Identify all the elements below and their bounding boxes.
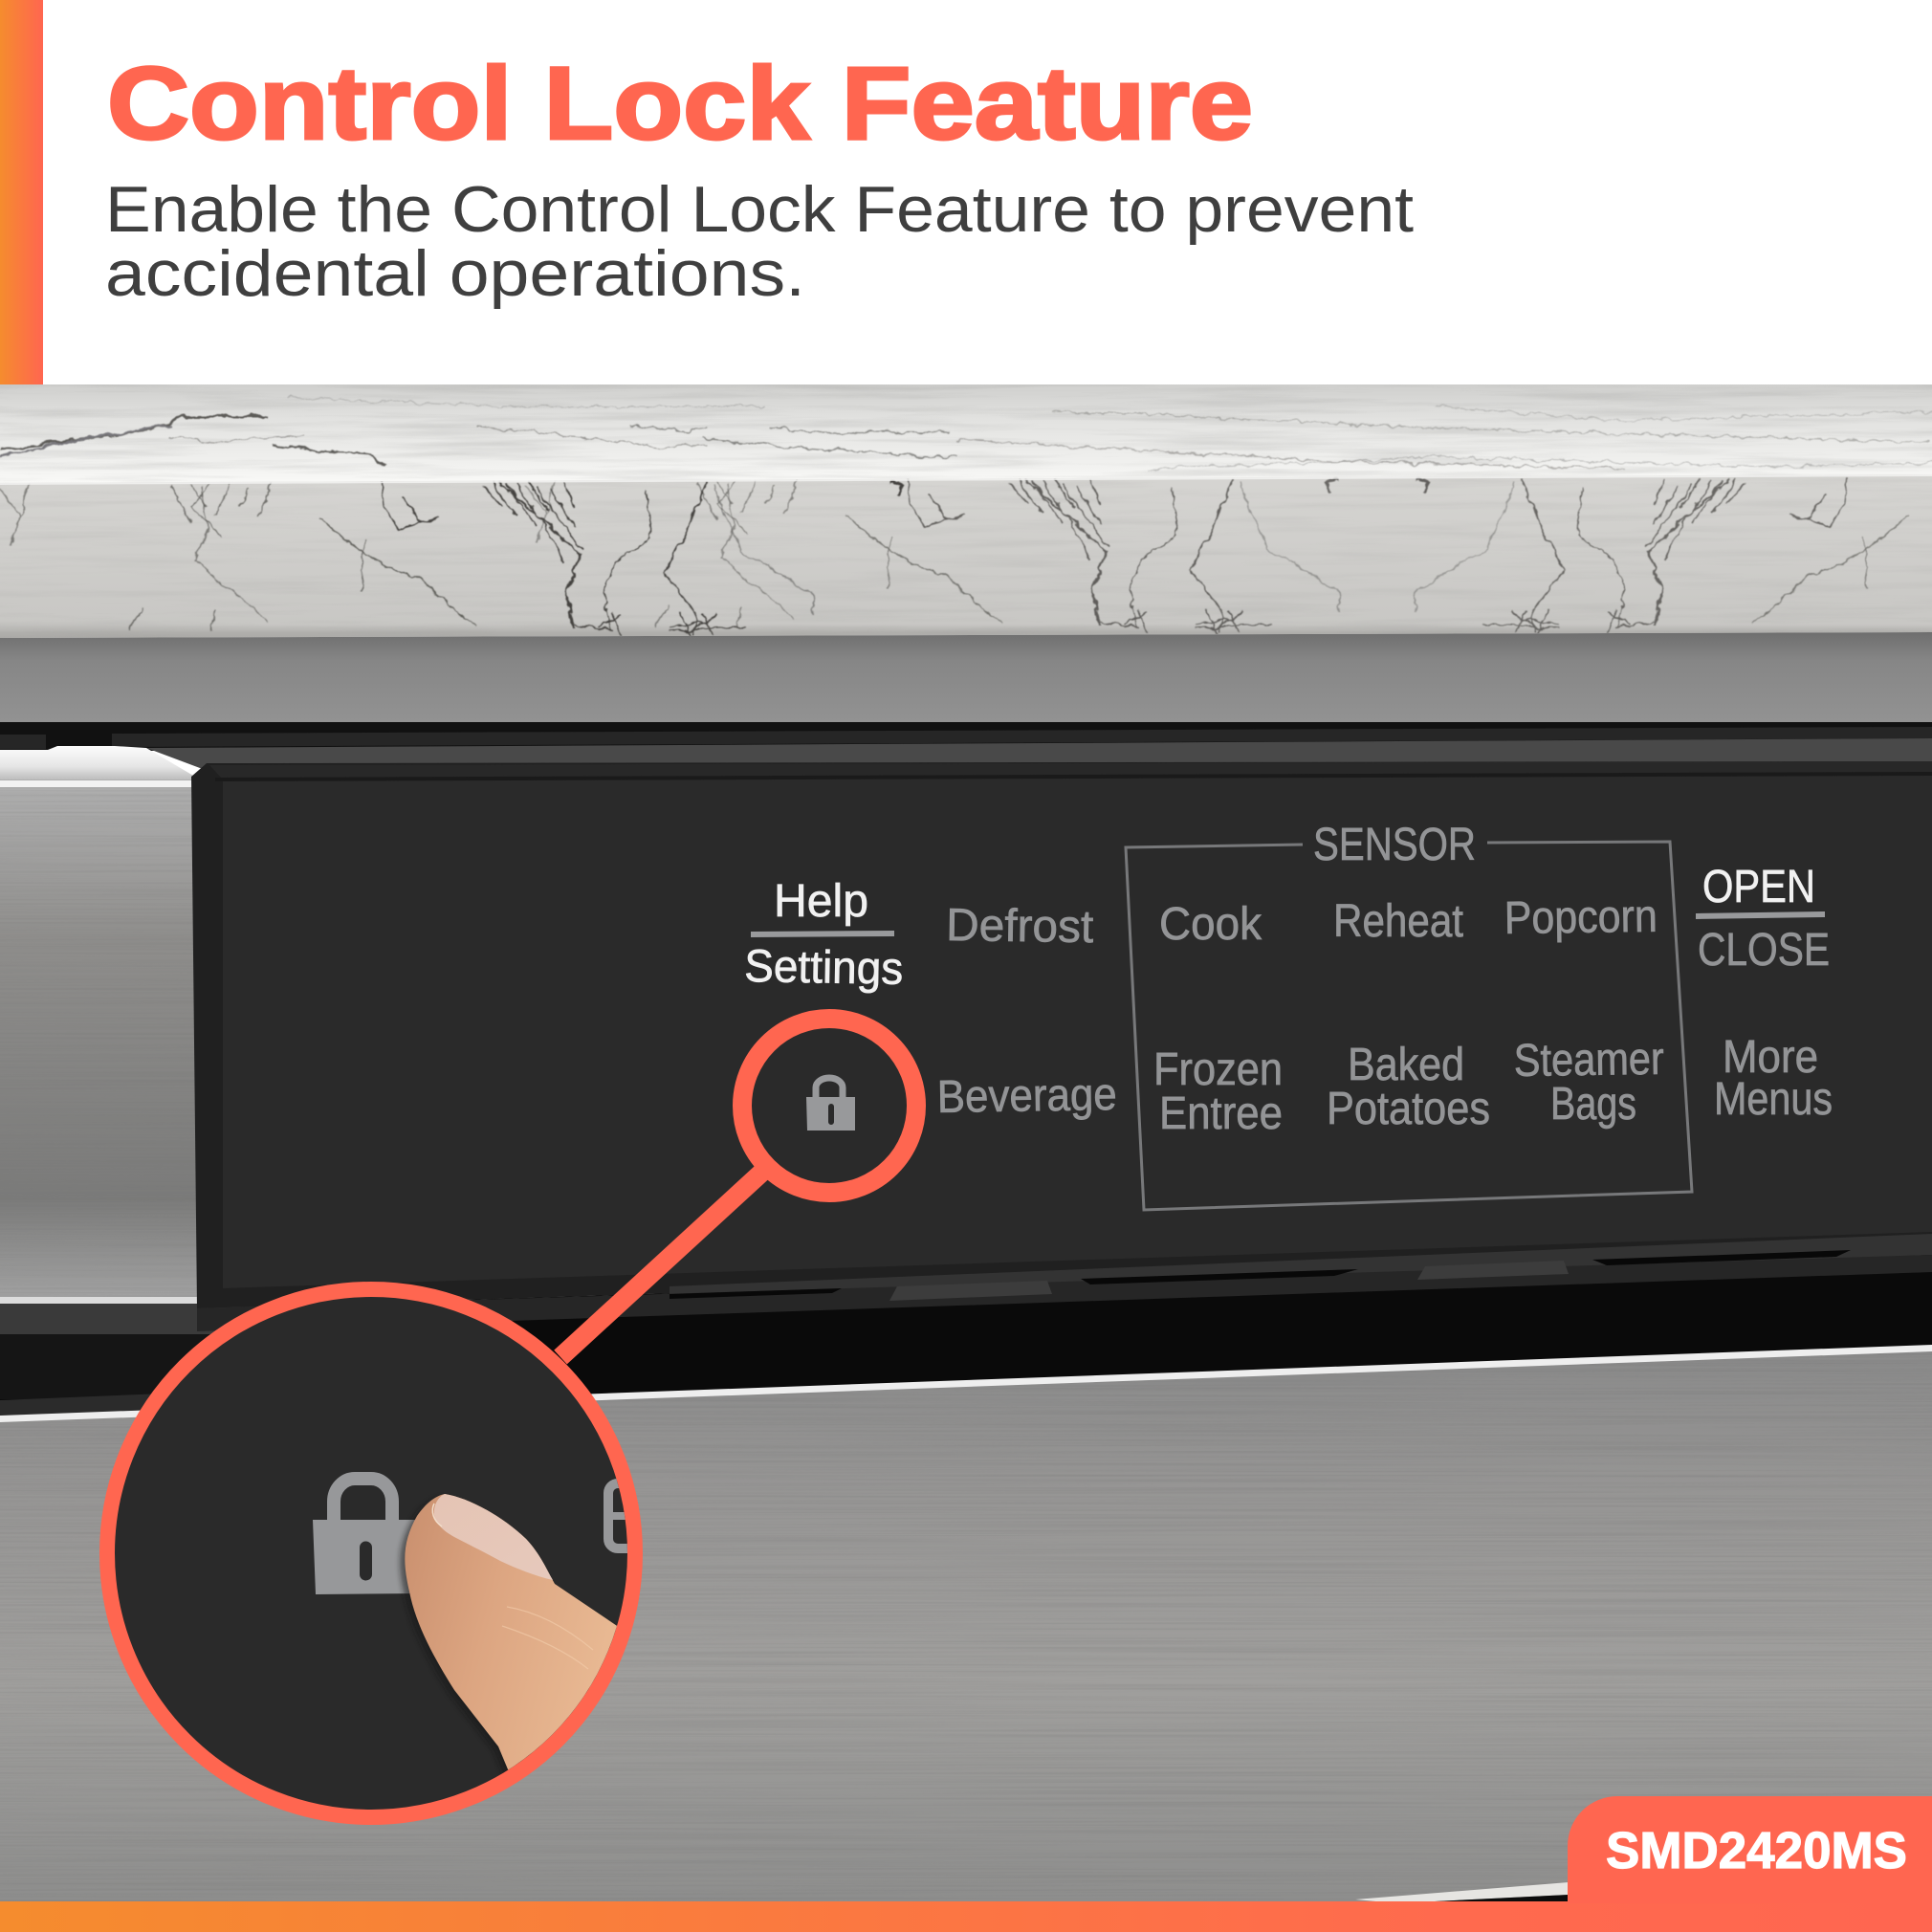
stainless door front <box>0 1345 1932 1903</box>
Baked Potatoes label <box>1327 1040 1490 1134</box>
More Menus label: Menus <box>1714 1074 1833 1125</box>
Baked Potatoes label: Baked <box>1348 1040 1464 1090</box>
Open / Close button label <box>1696 862 1830 976</box>
magnified callout circle <box>107 1289 647 1817</box>
Popcorn label: Popcorn <box>1504 891 1658 944</box>
Sensor group box <box>1126 842 1692 1210</box>
Help / Settings button label: Settings <box>744 941 904 995</box>
bottom accent bar <box>0 1901 1932 1932</box>
Steamer Bags label <box>1513 1034 1664 1130</box>
More Menus label: More <box>1723 1032 1818 1083</box>
panel control labels <box>744 820 1833 1210</box>
icon: magnified lock <box>313 1479 421 1594</box>
lower button segments <box>670 1250 1851 1301</box>
Sensor heading: SENSOR <box>1313 820 1476 870</box>
Cook label: Cook <box>1159 899 1262 950</box>
Steamer Bags label: Steamer <box>1513 1034 1664 1087</box>
icon: neighbouring key glyph, cropped <box>604 1479 627 1553</box>
title: Control Lock Feature <box>107 45 1253 161</box>
Defrost label: Defrost <box>946 900 1094 953</box>
Open / Close button label: CLOSE <box>1698 925 1830 976</box>
subtitle: Enable the Control Lock Feature to prevent <box>105 173 1414 246</box>
stainless side block <box>0 746 201 1304</box>
marble countertop front edge <box>0 472 1932 641</box>
Beverage label: Beverage <box>936 1069 1117 1123</box>
finger pressing the lock key <box>397 1494 617 1774</box>
Frozen Entree label <box>1153 1044 1283 1139</box>
control panel face <box>223 776 1932 1288</box>
Baked Potatoes label: Potatoes <box>1327 1084 1490 1134</box>
connector line between highlight rings <box>560 1165 770 1357</box>
subtitle: accidental operations. <box>105 237 805 310</box>
fingernail <box>434 1494 553 1580</box>
Open / Close button label: OPEN <box>1702 862 1815 912</box>
band and black gap below panel <box>0 1253 1932 1421</box>
Reheat label: Reheat <box>1333 896 1463 947</box>
wall panel under counter <box>0 632 1932 727</box>
Help / Settings button label <box>744 876 904 995</box>
dark top trim <box>0 722 1932 771</box>
Frozen Entree label: Frozen <box>1153 1044 1283 1095</box>
model badge <box>1568 1796 1932 1903</box>
model badge: SMD2420MS <box>1606 1822 1907 1879</box>
accent bar <box>0 0 43 384</box>
marble countertop top surface <box>0 384 1932 485</box>
highlight ring around lock key <box>742 1019 916 1193</box>
More Menus label <box>1714 1032 1833 1125</box>
subtitle <box>105 173 1414 310</box>
Frozen Entree label: Entree <box>1159 1088 1283 1139</box>
bright ragged top edge <box>0 474 1932 485</box>
photo scene: dishwasher under marble counter <box>0 384 1932 1903</box>
icon: small lock on panel <box>806 1078 855 1131</box>
control panel frame <box>191 761 1932 1331</box>
Steamer Bags label: Bags <box>1550 1079 1636 1130</box>
Help / Settings button label: Help <box>774 876 868 927</box>
header: white background and accent bar <box>0 0 1932 384</box>
